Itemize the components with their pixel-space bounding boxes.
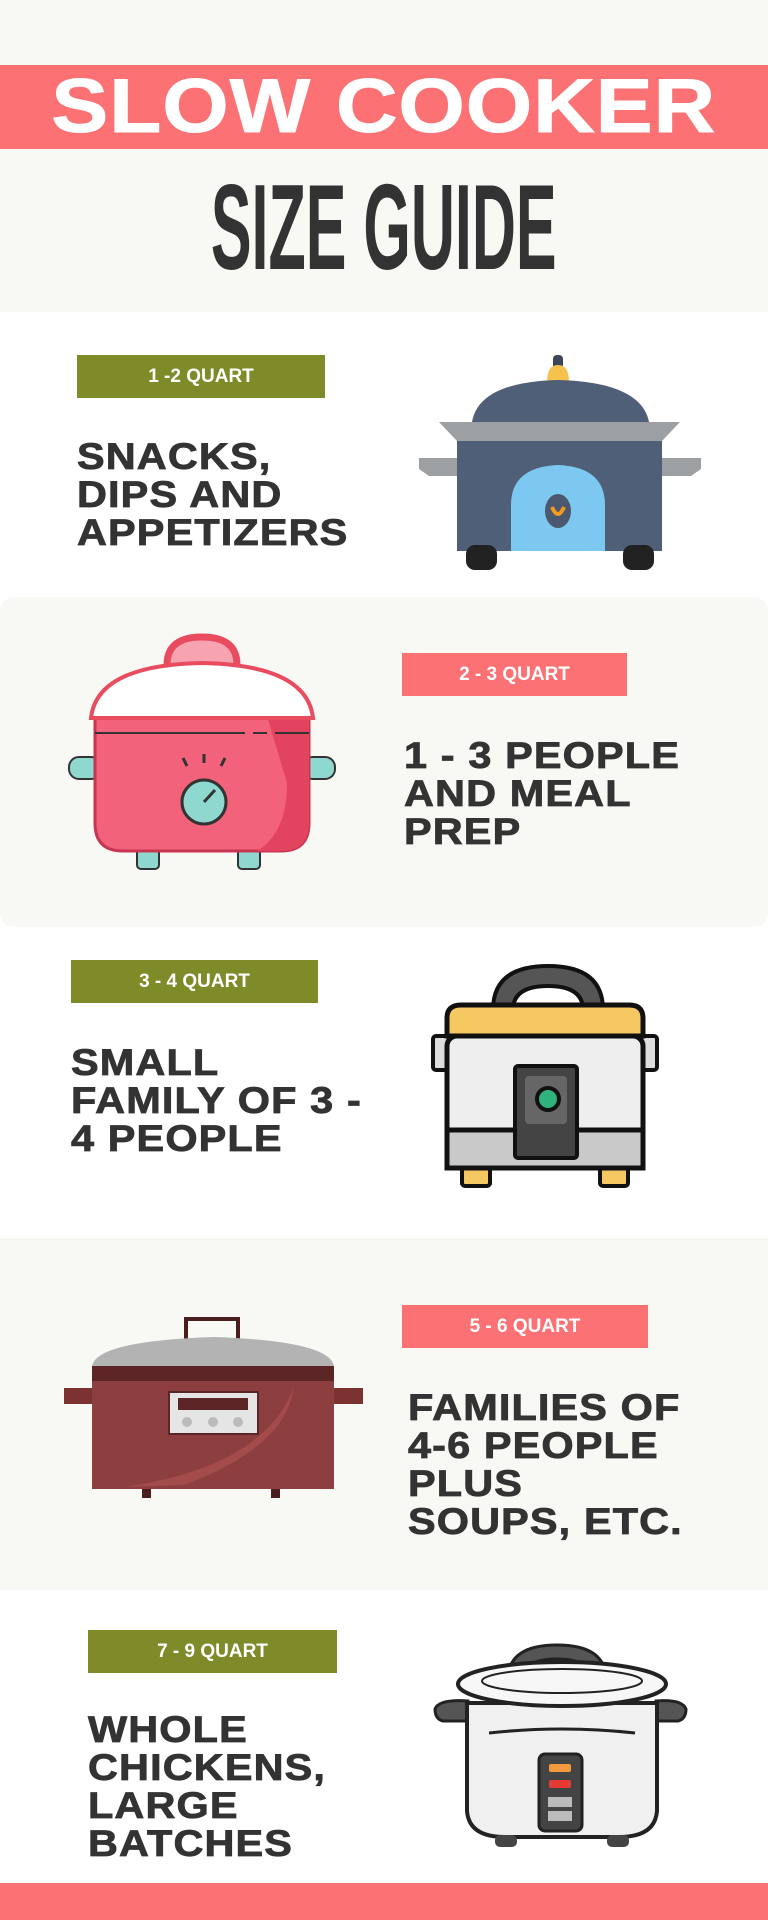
- heading: whole chickens: CHICKENS,: [88, 1747, 326, 1788]
- heading: snacks: DIPS AND: [77, 474, 282, 515]
- label: 3-4 quart: [71, 960, 318, 1003]
- label: 7-9 quart: 7 - 9 QUART: [157, 1641, 268, 1662]
- heading: small family: [71, 1042, 362, 1159]
- footer band: [0, 1883, 768, 1920]
- heading: families: 4-6 PEOPLE: [408, 1425, 659, 1466]
- label: 3-4 quart: 3 - 4 QUART: [139, 971, 250, 992]
- heading: whole chickens: LARGE: [88, 1785, 239, 1826]
- icon: blue slow cooker: [419, 355, 701, 570]
- heading: snacks: APPETIZERS: [77, 512, 348, 553]
- label: 1-2 quart: [77, 355, 325, 398]
- heading: whole chickens: BATCHES: [88, 1823, 293, 1864]
- panel: 2-3 quart: [68, 634, 680, 870]
- icon: red slow cooker: [64, 1317, 363, 1498]
- heading: small family: FAMILY OF 3 -: [71, 1080, 362, 1121]
- panel: 5-6 quart: [64, 1305, 683, 1542]
- panel: 3-4 quart: [71, 960, 659, 1188]
- label: 5-6 quart: 5 - 6 QUART: [470, 1316, 580, 1337]
- label: 5-6 quart: [402, 1305, 648, 1348]
- panel: 1-2 quart: [77, 355, 701, 570]
- heading: 1-3 people: AND MEAL: [404, 773, 632, 814]
- heading: families: FAMILIES OF: [408, 1387, 680, 1428]
- heading: 1-3 people: 1 - 3 PEOPLE: [404, 735, 680, 776]
- heading: whole chickens: WHOLE: [88, 1709, 248, 1750]
- heading: snacks: [77, 436, 348, 553]
- heading: families: PLUS: [408, 1463, 523, 1504]
- heading: whole chickens: [88, 1709, 326, 1864]
- heading: snacks: SNACKS,: [77, 436, 271, 477]
- panel: 7-9 quart: [88, 1630, 688, 1864]
- label: 2-3 quart: 2 - 3 QUART: [459, 664, 570, 685]
- label: 1-2 quart: 1 -2 QUART: [148, 366, 254, 387]
- heading: 1-3 people: [404, 735, 680, 852]
- heading: 1-3 people: PREP: [404, 811, 521, 852]
- heading: families: [408, 1387, 683, 1542]
- label: 2-3 quart: [402, 653, 627, 696]
- heading: small family: 4 PEOPLE: [71, 1118, 283, 1159]
- heading: families: SOUPS, ETC.: [408, 1501, 683, 1542]
- icon: white rice cooker: [434, 1644, 688, 1847]
- icon: pink slow cooker: [68, 634, 336, 870]
- title band: slow cooker: SLOW COOKER: [52, 64, 716, 149]
- title: size guide: SIZE GUIDE: [211, 159, 557, 295]
- heading: small family: SMALL: [71, 1042, 219, 1083]
- icon: rice cooker yellow: [431, 964, 659, 1188]
- label: 7-9 quart: [88, 1630, 337, 1673]
